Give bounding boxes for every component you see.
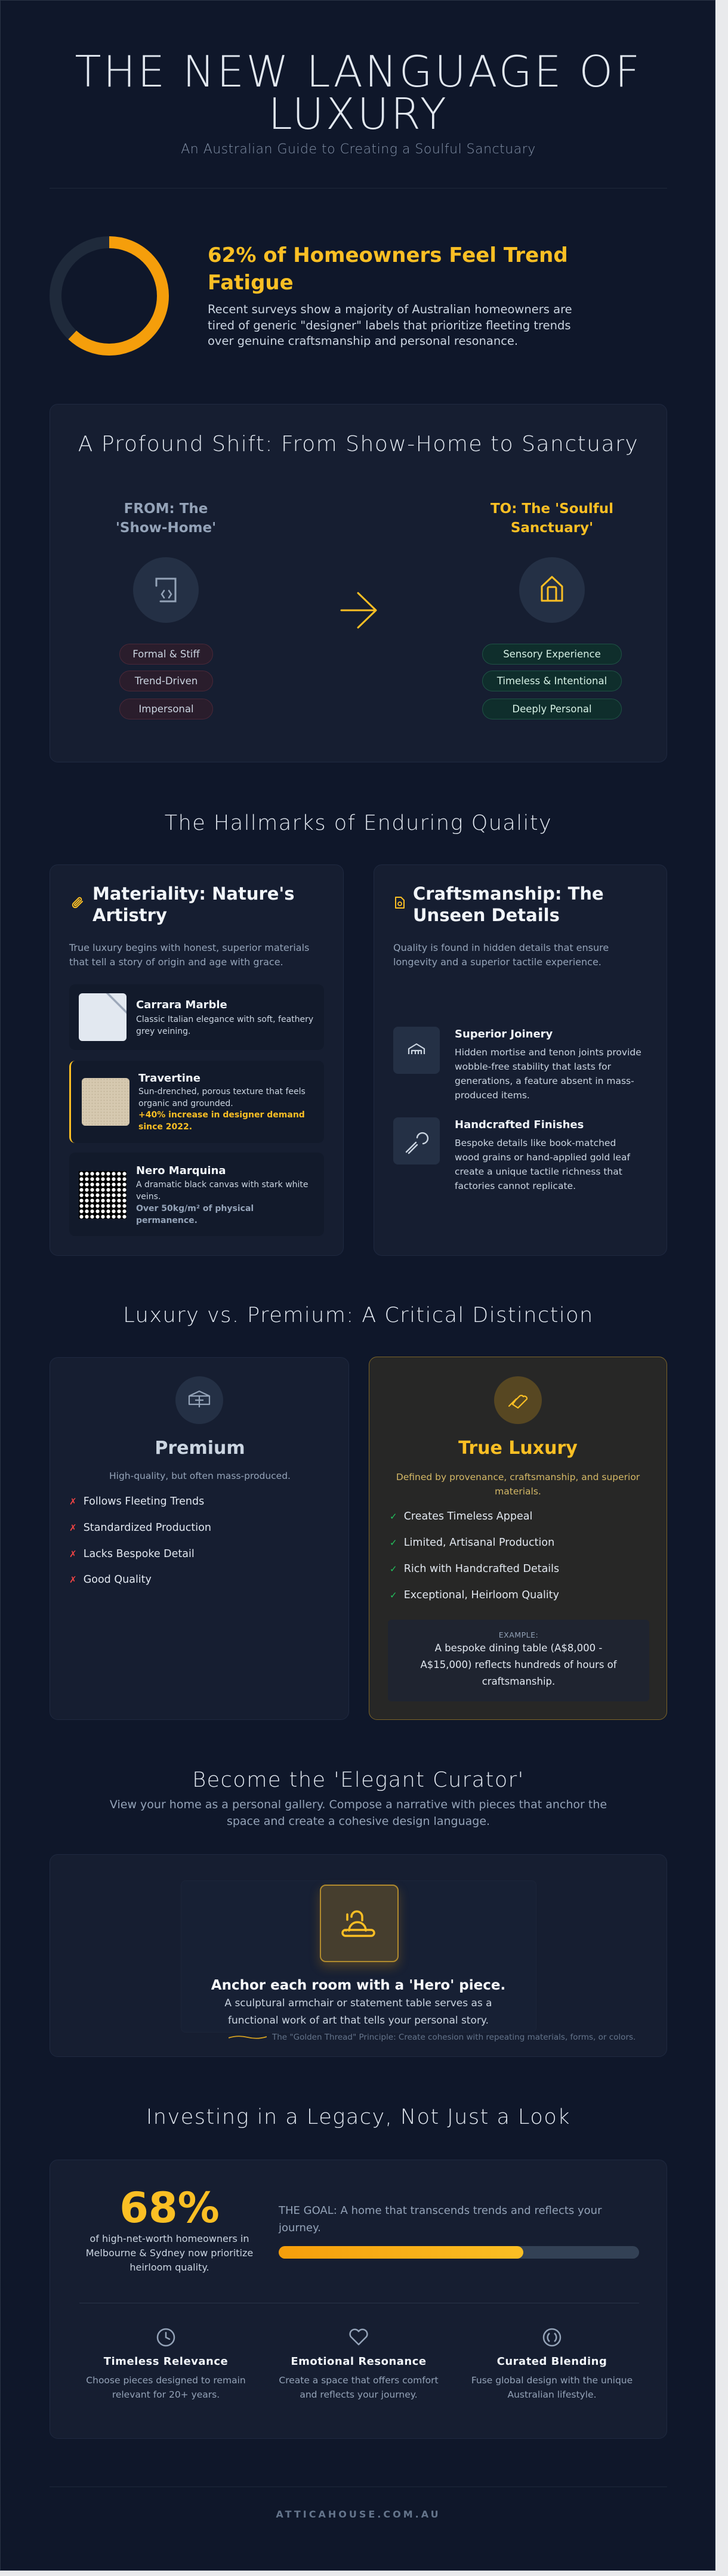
panel: premium	[50, 1357, 349, 1720]
icon: box	[175, 1376, 223, 1424]
curator subtitle: space and create a cohesive design language.	[227, 1815, 490, 1828]
material: travertine	[69, 1061, 324, 1143]
feature: timeless relevance: Choose pieces designed to remain	[86, 2375, 246, 2386]
materiality title: Materiality: Nature's	[92, 884, 295, 904]
goal text	[278, 2204, 601, 2234]
subtitle: An Australian Guide to Creating a Soulful Sanctuary	[181, 142, 536, 157]
title: LUXURY	[269, 89, 448, 139]
premium list	[69, 1496, 211, 1586]
luxury subtitle: Defined by provenance, craftsmanship, and superior	[396, 1472, 640, 1482]
tags: from: Formal & Stiff	[132, 648, 200, 660]
luxury subtitle	[396, 1472, 640, 1497]
luxury list: ✓ Exceptional, Heirloom Quality	[390, 1589, 559, 1601]
craftsmanship desc: Quality is found in hidden details that ensure	[393, 942, 609, 953]
icon: finishes	[393, 1117, 440, 1165]
craftsmanship title: Craftsmanship: The	[413, 884, 604, 904]
materiality title: Artistry	[92, 905, 167, 925]
joinery text: Superior Joinery	[455, 1028, 553, 1040]
material: travertine: Travertine	[138, 1072, 200, 1085]
premium subtitle: High-quality, but often mass-produced.	[109, 1471, 291, 1481]
tags: to: Sensory Experience	[503, 648, 601, 660]
stat: 68%	[86, 2183, 253, 2273]
panel: profound shift	[50, 404, 667, 762]
panel: materiality	[50, 864, 344, 1256]
example box: A$15,000) reflects hundreds of hours of	[420, 1659, 617, 1670]
stat heading: 62% of Homeowners Feel Trend	[208, 243, 568, 267]
luxury list: ✓ Creates Timeless Appeal	[390, 1511, 532, 1522]
panel: hero piece	[50, 1854, 667, 2057]
materiality title	[92, 884, 295, 925]
joinery text: produced items.	[455, 1090, 530, 1101]
panel: legacy	[50, 2160, 667, 2439]
to heading: Sanctuary'	[511, 520, 593, 536]
progress bar	[279, 2246, 639, 2259]
material: nero marquina	[69, 1153, 324, 1236]
luxury subtitle: materials.	[495, 1486, 541, 1497]
shift heading: A Profound Shift: From Show-Home to Sanctuary	[78, 432, 638, 456]
title: THE NEW LANGUAGE OF	[75, 47, 642, 97]
feature: curated blending	[471, 2328, 633, 2400]
tags: from	[119, 644, 213, 719]
feature: emotional resonance: and reflects your journey.	[300, 2389, 418, 2400]
heading: luxury vs premium: Luxury vs. Premium: A Critical Distinction	[123, 1304, 594, 1327]
craftsmanship title	[413, 884, 604, 925]
finishes text: Bespoke details like book-matched	[455, 1138, 616, 1148]
material: carrara	[69, 984, 324, 1050]
craftsmanship title: Unseen Details	[413, 905, 560, 925]
panel: craftsmanship	[374, 864, 667, 1256]
from heading	[116, 501, 216, 536]
example box: EXAMPLE:	[499, 1630, 538, 1639]
joinery text	[455, 1028, 641, 1101]
luxury list: ✓ Limited, Artisanal Production	[390, 1537, 554, 1549]
finishes text: wood grains or hand-applied gold leaf	[455, 1152, 630, 1163]
hero desc: A sculptural armchair or statement table serves as a	[224, 1997, 492, 2009]
tags: to	[482, 644, 622, 719]
to heading: TO: The 'Soulful	[491, 501, 613, 517]
heading: legacy: Investing in a Legacy, Not Just a Look	[146, 2105, 570, 2129]
feature: emotional resonance: Emotional Resonance	[291, 2355, 427, 2368]
stat: 68%: heirloom quality.	[129, 2262, 209, 2273]
joinery text: Hidden mortise and tenon joints provide	[455, 1047, 641, 1058]
material: nero marquina: Nero Marquina	[136, 1165, 226, 1177]
premium list: ✗ Good Quality	[69, 1574, 152, 1586]
hero desc: functional work of art that tells your personal story.	[228, 2015, 489, 2027]
icon: show-home	[133, 557, 199, 623]
stat: 68%: of high-net-worth homeowners in	[90, 2233, 249, 2244]
feature: curated blending: Curated Blending	[497, 2355, 607, 2368]
panel: true luxury	[369, 1357, 667, 1720]
goal text: THE GOAL: A home that transcends trends and reflects your	[279, 2204, 601, 2217]
feature: emotional resonance: Create a space that offers comfort	[279, 2375, 439, 2386]
premium list: ✗ Follows Fleeting Trends	[69, 1496, 204, 1508]
feature: timeless relevance: relevant for 20+ years.	[112, 2389, 220, 2400]
feature: timeless relevance: Timeless Relevance	[104, 2355, 228, 2368]
feature: curated blending: Fuse global design with the unique	[471, 2375, 633, 2386]
finishes text: Handcrafted Finishes	[455, 1119, 584, 1131]
premium list: ✗ Lacks Bespoke Detail	[69, 1548, 195, 1560]
example box: A bespoke dining table (A$8,000 -	[435, 1642, 602, 1654]
material: travertine: +40% increase in designer demand	[138, 1110, 305, 1120]
icon: hero piece	[320, 1885, 399, 1962]
icon: joinery	[393, 1027, 440, 1074]
finishes text	[455, 1119, 630, 1191]
footer: ATTICAHOUSE.COM.AU	[276, 2509, 441, 2520]
hero heading: Anchor each room with a 'Hero' piece.	[211, 1978, 505, 1993]
feature: curated blending: Australian lifestyle.	[507, 2389, 597, 2400]
stat: 68%: Melbourne & Sydney now prioritize	[86, 2247, 253, 2259]
title	[75, 47, 642, 139]
heading: hallmarks: The Hallmarks of Enduring Quality	[165, 811, 552, 835]
joinery text: wobble-free stability that lasts for	[455, 1061, 611, 1072]
materiality desc: True luxury begins with honest, superior materials	[69, 942, 309, 953]
materiality desc: that tell a story of origin and age with grace.	[69, 956, 283, 968]
stat heading: Fatigue	[208, 271, 294, 295]
material: nero marquina: Over 50kg/m² of physical	[136, 1204, 254, 1213]
material: travertine: Sun-drenched, porous texture that feels	[138, 1087, 306, 1097]
joinery text: generations, a feature absent in mass-	[455, 1076, 634, 1086]
donut chart: 62%	[50, 236, 169, 356]
luxury title: True Luxury	[458, 1438, 578, 1459]
material: carrara: Classic Italian elegance with soft, feathery	[136, 1015, 313, 1024]
material: nero marquina: A dramatic black canvas with stark white	[136, 1180, 309, 1190]
tags: from: Impersonal	[138, 703, 194, 715]
stat: 68%: 68%	[119, 2183, 220, 2232]
from heading: FROM: The	[124, 501, 208, 517]
icon: sanctuary	[519, 557, 585, 623]
material: travertine: since 2022.	[138, 1122, 192, 1132]
luxury list: ✓ Rich with Handcrafted Details	[390, 1563, 559, 1575]
icon: document	[395, 897, 405, 909]
curator subtitle	[110, 1798, 607, 1828]
material: nero marquina: permanence.	[136, 1216, 198, 1225]
feature: emotional resonance	[279, 2328, 439, 2400]
tags: from: Trend-Driven	[135, 675, 198, 687]
goal text: journey.	[279, 2222, 321, 2234]
arrow	[340, 592, 377, 629]
icon: paperclip	[72, 897, 83, 908]
stat heading	[208, 243, 568, 295]
stat body: Recent surveys show a majority of Australian homeowners are	[208, 302, 572, 316]
luxury list	[390, 1511, 559, 1601]
curator subtitle: View your home as a personal gallery. Compose a narrative with pieces that anchor the	[110, 1798, 607, 1811]
stat body	[208, 302, 572, 348]
materiality desc	[69, 942, 309, 968]
example box	[388, 1620, 649, 1701]
tags: to: Deeply Personal	[512, 703, 592, 715]
material: carrara: Carrara Marble	[136, 999, 227, 1011]
heading: elegant curator: Become the 'Elegant Curator'	[192, 1768, 525, 1792]
to heading	[491, 501, 613, 536]
example box: craftsmanship.	[482, 1676, 555, 1687]
premium title: Premium	[155, 1438, 245, 1459]
craftsmanship desc	[393, 942, 609, 968]
material: nero marquina: veins.	[136, 1192, 161, 1201]
stat body: tired of generic "designer" labels that prioritize fleeting trends	[208, 319, 571, 332]
golden thread note: The "Golden Thread" Principle: Create cohesion with repeating materials, forms, or colors.	[272, 2033, 636, 2042]
hero desc	[224, 1997, 492, 2027]
finishes text: factories cannot replicate.	[455, 1181, 576, 1191]
material: carrara: grey veining.	[136, 1027, 190, 1036]
from heading: 'Show-Home'	[116, 520, 216, 536]
material: travertine: organic and grounded.	[138, 1099, 233, 1108]
premium list: ✗ Standardized Production	[69, 1522, 211, 1534]
craftsmanship desc: longevity and a superior tactile experience.	[393, 956, 601, 968]
stat body: over genuine craftsmanship and personal resonance.	[208, 334, 518, 348]
tags: to: Timeless & Intentional	[497, 675, 607, 687]
icon: luxury	[494, 1376, 542, 1424]
finishes text: create a unique tactile richness that	[455, 1166, 622, 1177]
feature: timeless relevance	[86, 2328, 246, 2400]
